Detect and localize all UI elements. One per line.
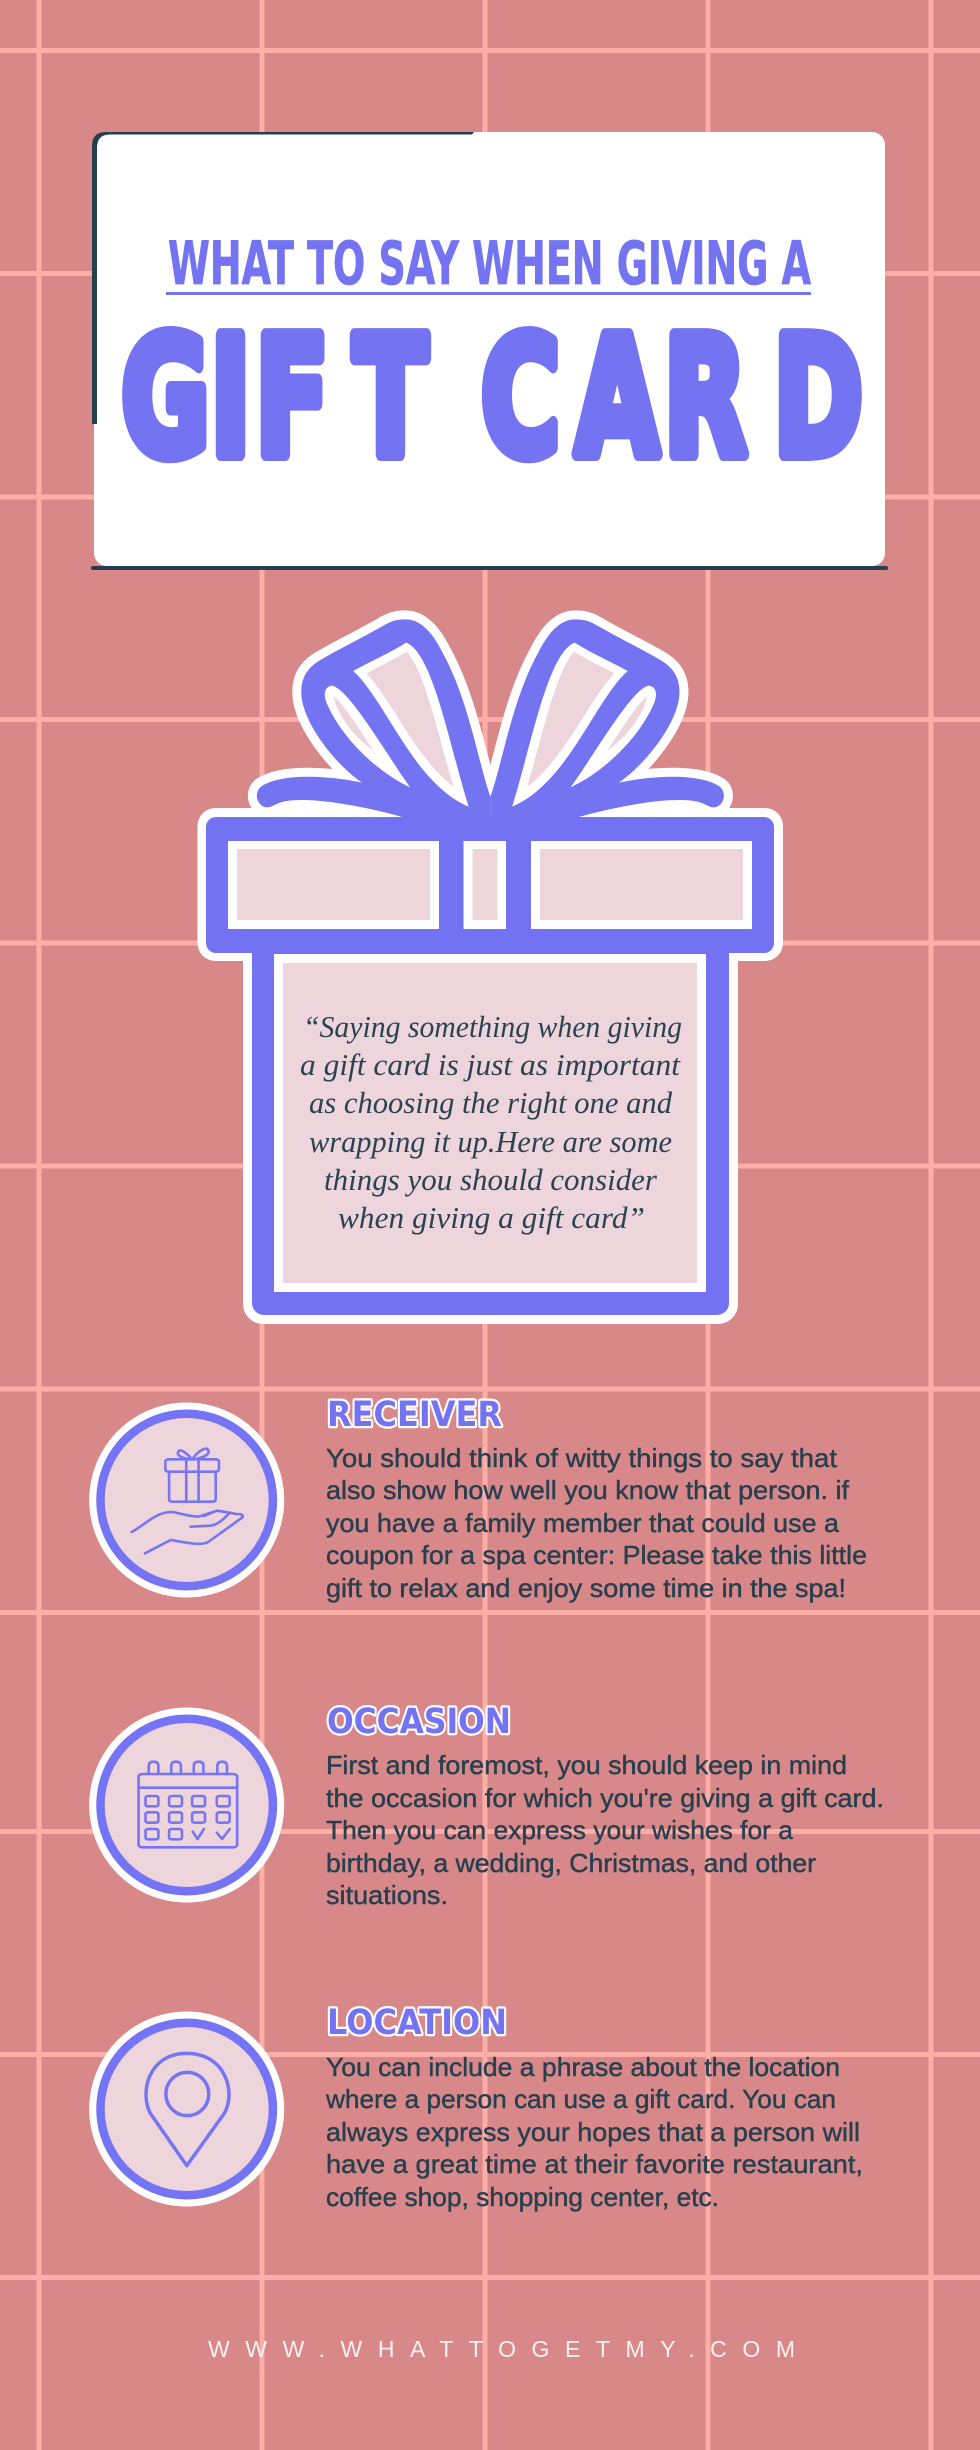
section: location: [89, 2003, 863, 2212]
box body pink panel: [283, 963, 697, 1283]
location body text: coffee shop, shopping center, etc.: [326, 2182, 719, 2212]
occasion circle: [89, 1708, 284, 1902]
ribbon bow: [257, 619, 724, 817]
card dark edge top-left: [92, 132, 474, 424]
box body: [252, 940, 729, 1315]
quote text: when giving a gift card”: [338, 1200, 645, 1235]
receiver body text: You should think of witty things to say that: [326, 1443, 838, 1473]
receiver heading: RECEIVER: [327, 1395, 502, 1435]
lid left panel: [228, 841, 439, 929]
title: gift card: GIFT CARD: [121, 303, 863, 493]
icon: calendar: [139, 1762, 237, 1847]
location body text: where a person can use a gift card. You can: [325, 2084, 836, 2114]
section: occasion: [89, 1702, 884, 1910]
box body inner frame: [274, 954, 706, 1292]
white outlines of gift: [198, 619, 783, 1324]
icon: map pin: [146, 2053, 229, 2166]
quote text: [300, 1009, 682, 1235]
location body text: [325, 2052, 863, 2212]
title underline: [166, 292, 811, 295]
lid middle panel: [464, 841, 506, 929]
panel: title card: [91, 132, 888, 570]
card dark edge bottom: [91, 566, 888, 570]
location body text: always express your hopes that a person will: [326, 2117, 860, 2147]
receiver body text: gift to relax and enjoy some time in the spa!: [326, 1573, 846, 1603]
occasion body text: birthday, a wedding, Christmas, and other: [326, 1848, 816, 1878]
box lid: [206, 817, 774, 953]
occasion body text: First and foremost, you should keep in mind: [326, 1750, 847, 1780]
location body text: You can include a phrase about the location: [326, 2052, 840, 2082]
location circle: [89, 2012, 284, 2206]
occasion body text: the occasion for which you're giving a gift card.: [326, 1783, 884, 1813]
icon: gift on open hand: [132, 1449, 243, 1553]
lid right panel: [531, 841, 752, 929]
occasion body text: Then you can express your wishes for a: [326, 1815, 794, 1845]
gift box illustration: [198, 619, 783, 1324]
occasion body text: situations.: [326, 1880, 448, 1910]
location body text: have a great time at their favorite restaurant,: [326, 2149, 863, 2179]
footer website: WWW.WHATTOGETMY.COM: [208, 2336, 795, 2362]
receiver body text: also show how well you know that person. if: [326, 1475, 850, 1505]
quote text: wrapping it up.Here are some: [309, 1124, 672, 1159]
receiver body text: coupon for a spa center: Please take this little: [326, 1540, 867, 1570]
card background: [94, 132, 885, 566]
quote text: as choosing the right one and: [309, 1085, 672, 1120]
occasion heading: OCCASION: [327, 1702, 511, 1742]
section: receiver: [89, 1395, 867, 1603]
quote text: a gift card is just as important: [300, 1047, 681, 1082]
receiver body text: you have a family member that could use a: [326, 1508, 840, 1538]
quote text: things you should consider: [324, 1162, 658, 1197]
receiver circle: [89, 1402, 284, 1598]
receiver body text: [326, 1443, 867, 1603]
location heading: LOCATION: [327, 2003, 507, 2043]
occasion body text: [326, 1750, 884, 1910]
quote text: “Saying something when giving: [303, 1009, 682, 1044]
